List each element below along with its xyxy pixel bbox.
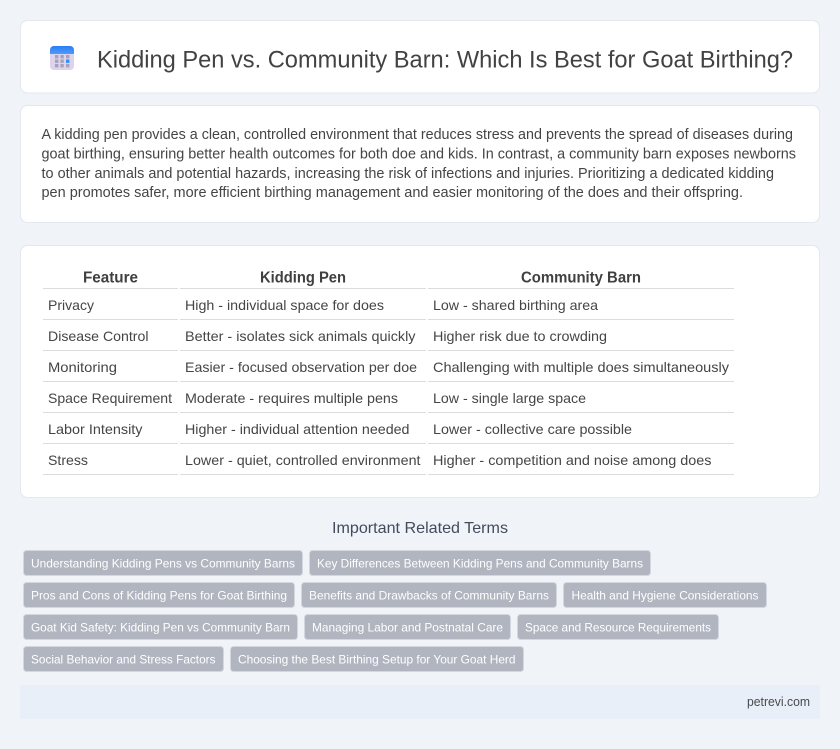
icon: calendar	[50, 46, 74, 70]
tag: Social Behavior and Stress Factors	[31, 652, 216, 666]
panel: description	[20, 106, 820, 222]
tag: Pros and Cons of Kidding Pens for Goat Birthing	[31, 588, 287, 602]
row: privacy	[43, 297, 734, 320]
row: monitoring: Monitoring	[48, 359, 117, 375]
table header: Feature	[83, 270, 138, 287]
row: privacy: High - individual space for does	[185, 297, 384, 313]
tag	[24, 614, 298, 640]
row: privacy: Low - shared birthing area	[433, 297, 598, 313]
tag	[304, 614, 510, 640]
table header: Kidding Pen	[260, 270, 346, 287]
tag	[230, 646, 524, 672]
table header	[43, 270, 734, 289]
tag: Managing Labor and Postnatal Care	[312, 620, 503, 634]
description text	[42, 127, 796, 201]
row: disease control	[43, 328, 734, 351]
tag: Space and Resource Requirements	[525, 620, 711, 634]
panel: header	[20, 20, 820, 93]
tag: Choosing the Best Birthing Setup for Your Goat Herd	[238, 652, 516, 666]
tag	[518, 614, 718, 640]
tag: Goat Kid Safety: Kidding Pen vs Community Barn	[31, 620, 290, 634]
description text: goat birthing, ensuring better health outcomes for both doe and kids. In contrast, a community barn exposes newborns	[42, 146, 796, 162]
footer	[20, 685, 820, 719]
tag: Benefits and Drawbacks of Community Barns	[309, 588, 549, 602]
description text: A kidding pen provides a clean, controlled environment that reduces stress and prevents the spread of diseases during	[42, 127, 793, 143]
row: space requirement	[43, 390, 734, 413]
row: space requirement: Low - single large space	[433, 390, 586, 406]
row: monitoring: Easier - focused observation per doe	[185, 359, 417, 375]
row: stress: Higher - competition and noise among does	[433, 452, 712, 468]
heading: important related terms: Important Related Terms	[332, 520, 508, 537]
row: labor intensity	[43, 421, 734, 444]
row: space requirement: Space Requirement	[48, 390, 172, 406]
tag	[24, 550, 302, 576]
row: labor intensity: Higher - individual attention needed	[185, 421, 410, 437]
row: stress: Lower - quiet, controlled environment	[185, 452, 421, 468]
tag	[24, 582, 294, 608]
description text: pen promotes safer, more efficient birthing management and easier monitoring of the does and their offspring.	[42, 185, 743, 201]
tag: Understanding Kidding Pens vs Community Barns	[31, 556, 295, 570]
table header: Community Barn	[521, 270, 641, 287]
row: stress: Stress	[48, 452, 88, 468]
row: labor intensity: Lower - collective care possible	[433, 421, 632, 437]
title: Kidding Pen vs. Community Barn: Which Is Best for Goat Birthing?	[97, 46, 793, 73]
row: monitoring	[43, 359, 734, 382]
row: disease control: Disease Control	[48, 328, 148, 344]
panel: related term tags	[24, 550, 766, 672]
panel: comparison table	[20, 246, 820, 498]
footer credit: petrevi.com	[747, 695, 810, 709]
tag	[310, 550, 650, 576]
row: space requirement: Moderate - requires multiple pens	[185, 390, 398, 406]
description text: to other animals and potential hazards, increasing the risk of infections and injuries. Prioritizing a dedicated kidding	[42, 166, 774, 182]
row: disease control: Higher risk due to crowding	[433, 328, 607, 344]
tag: Key Differences Between Kidding Pens and Community Barns	[317, 556, 643, 570]
tag	[564, 582, 766, 608]
tag	[24, 646, 224, 672]
row: labor intensity: Labor Intensity	[48, 421, 142, 437]
row: disease control: Better - isolates sick animals quickly	[185, 328, 416, 344]
row: privacy: Privacy	[48, 297, 94, 313]
row: monitoring: Challenging with multiple does simultaneously	[433, 359, 729, 375]
row: stress	[43, 452, 734, 475]
tag	[302, 582, 556, 608]
tag: Health and Hygiene Considerations	[572, 588, 758, 602]
